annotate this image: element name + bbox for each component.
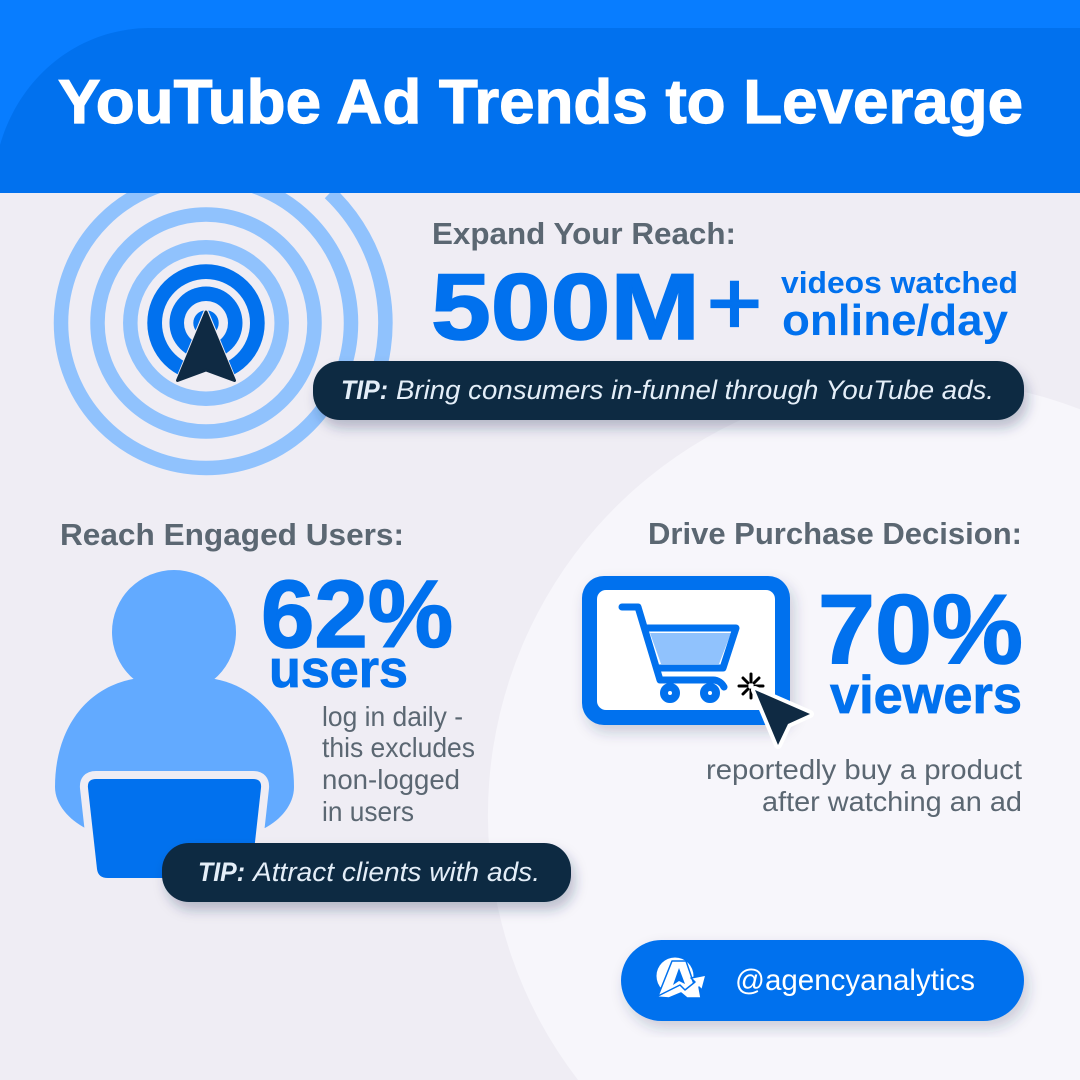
header band [0, 0, 1080, 193]
brand pill: agencyanalytics: @agencyanalytics [735, 964, 975, 997]
title: YouTube Ad Trends to Leverage [58, 68, 1023, 137]
text: log in daily note: non-logged [322, 764, 460, 795]
text: log in daily note: in users [322, 796, 414, 827]
text: purchase note: after watching an ad [762, 786, 1022, 817]
stat label: videos watched online/day [781, 265, 1018, 345]
tip pill: funnel: Bring consumers in-funnel through YouTube ads. [396, 375, 994, 405]
heading: drive purchase decision: Drive Purchase Decision: [648, 516, 1022, 551]
light background circle [488, 380, 1080, 1080]
stat label: videos watched online/day: online/day [782, 296, 1009, 345]
brand pill: agencyanalytics [621, 940, 1024, 1021]
text: log in daily note [322, 701, 475, 827]
heading: expand your reach: Expand Your Reach: [432, 216, 736, 251]
icon: agency analytics logo [656, 958, 706, 998]
text: purchase note [706, 754, 1022, 817]
tip pill: funnel: TIP: [341, 375, 388, 405]
stat: 500M+: 500M [431, 254, 700, 359]
icon: person at laptop [55, 570, 294, 878]
icon: shopping cart on screen with cursor [582, 576, 810, 745]
stat label: videos watched online/day: videos watched [781, 265, 1018, 300]
tip pill: attract clients: TIP: [198, 857, 245, 887]
heading: reach engaged users: Reach Engaged Users: [60, 517, 404, 552]
stat label: viewers: viewers [830, 666, 1022, 725]
stat: 62%: 62% [261, 561, 453, 668]
icon: signal rings with navigation arrow [61, 178, 385, 468]
stat label: users: users [269, 640, 408, 699]
tip pill: attract clients: Attract clients with ads. [251, 857, 540, 887]
stat: 70%: 70% [818, 574, 1023, 684]
tip pill: attract clients [162, 843, 571, 902]
text: purchase note: reportedly buy a product [706, 754, 1022, 785]
stat: 500M+: + [707, 254, 762, 354]
tip pill: funnel [313, 361, 1024, 420]
text: log in daily note: this excludes [322, 732, 475, 763]
text: log in daily note: log in daily - [322, 701, 463, 732]
